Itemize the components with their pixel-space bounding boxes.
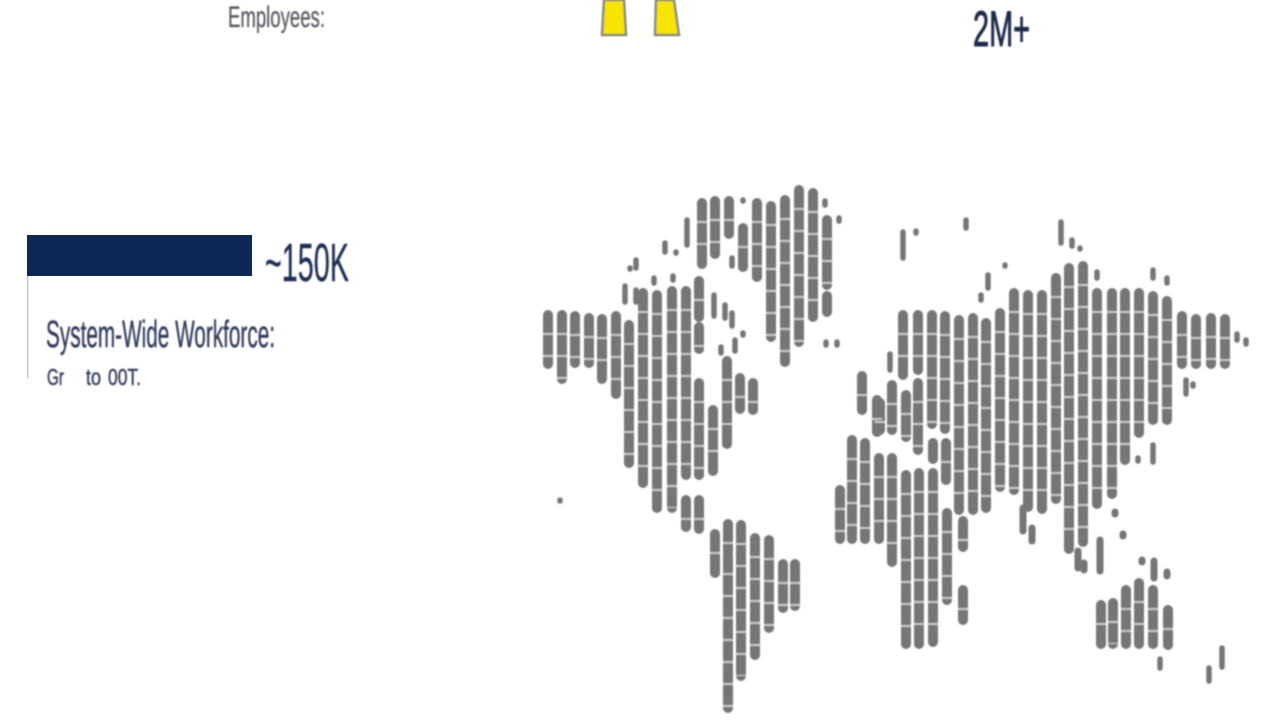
label: Employees: Employees:	[228, 1, 325, 34]
label: workforce note	[47, 364, 141, 390]
world map made of people	[548, 190, 1246, 708]
region: North America	[548, 281, 753, 529]
region: Southeast Asia	[1023, 508, 1167, 578]
icon: yellow figure legs	[602, 0, 679, 35]
region: North American islands	[560, 200, 839, 501]
region: South America	[715, 524, 795, 708]
value: 2M+: 2M+	[973, 1, 1030, 57]
label: workforce note: Gr	[47, 364, 64, 390]
label: workforce note: to	[86, 364, 101, 390]
region: Asia	[903, 266, 1225, 549]
region: Greenland and Canadian Arctic	[702, 190, 827, 362]
label: workforce note: 00T.	[108, 364, 141, 390]
value: ~150K: ~150K	[265, 233, 349, 293]
bar: system-wide workforce	[27, 235, 252, 378]
label: System-Wide Workforce: System-Wide Workforce:	[46, 314, 275, 356]
region: Arctic and Asian islands	[890, 220, 1246, 462]
region: Australia and New Zealand	[1101, 583, 1168, 645]
region: Europe and Africa	[840, 376, 963, 644]
